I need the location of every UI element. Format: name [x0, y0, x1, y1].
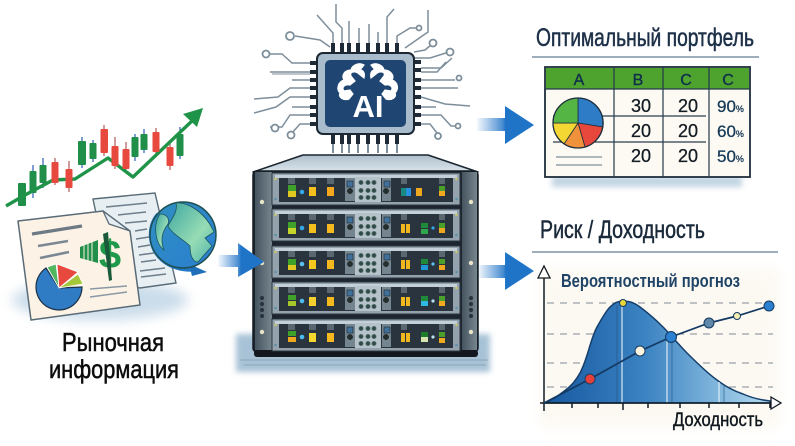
chip pins: [310, 43, 421, 144]
server shadow: [236, 334, 490, 372]
table header: [574, 72, 734, 89]
chip AI label: AI: [352, 89, 384, 124]
chart axes: [540, 270, 778, 411]
label: market information: Рыночная: [62, 327, 164, 357]
label: market information: [49, 327, 179, 384]
label: return axis: Доходность: [673, 410, 763, 431]
table percentages: 50%: [717, 147, 744, 166]
AI chip: [254, 4, 470, 153]
server unit 1: [272, 173, 460, 205]
distribution curve: [544, 301, 770, 403]
table header: B: [633, 72, 643, 89]
icon: brain: [338, 64, 397, 100]
chip body: [317, 53, 414, 134]
table values: 20: [631, 121, 651, 141]
server unit 5: [272, 319, 460, 351]
table percentages: [717, 97, 744, 166]
table values: 30: [631, 96, 651, 116]
table values: 20: [678, 146, 698, 166]
panel: optimal portfolio: [532, 24, 759, 187]
table header: C: [722, 72, 734, 89]
server unit 2: [272, 209, 460, 241]
back document: [93, 193, 176, 288]
circuit traces: [254, 4, 470, 153]
documents shadow: [12, 280, 188, 320]
label: market information: информация: [49, 354, 179, 384]
server unit 4: [272, 282, 460, 314]
portfolio table: [545, 67, 750, 177]
front document with pie and dollar: [18, 211, 140, 320]
table values: 20: [631, 146, 651, 166]
heading: risk and return: Риск / Доходность: [540, 216, 705, 244]
icon: dollar and coins: $: [99, 233, 121, 277]
table values: [631, 96, 698, 166]
panel: market data: [6, 108, 216, 384]
icon: portfolio pie: [553, 98, 603, 148]
probability chart: [538, 266, 781, 431]
trend line with markers: [544, 300, 774, 403]
chart background: [540, 268, 780, 428]
table header: C: [680, 72, 692, 89]
table values: 20: [678, 96, 698, 116]
rack top: [253, 155, 478, 172]
icon: globe: [150, 202, 216, 276]
table shadow: [552, 176, 742, 187]
rack screws and vents: [260, 200, 473, 334]
icon: pie chart: [36, 264, 83, 310]
table values: 20: [678, 121, 698, 141]
panel: risk and return: [532, 216, 781, 431]
arrow: market data to server: [218, 243, 264, 277]
arrow: server to risk chart: [478, 252, 534, 290]
rack body: [253, 171, 478, 352]
table percentages: 60%: [717, 122, 744, 141]
table percentages: 90%: [717, 97, 744, 116]
server rack: [253, 155, 478, 357]
server unit 3: [272, 246, 460, 278]
table header: A: [574, 72, 585, 89]
candlestick chart with trend arrow: [6, 108, 203, 206]
arrow: server to portfolio: [477, 106, 534, 144]
label: probabilistic forecast: Вероятностный прогноз: [561, 271, 740, 291]
